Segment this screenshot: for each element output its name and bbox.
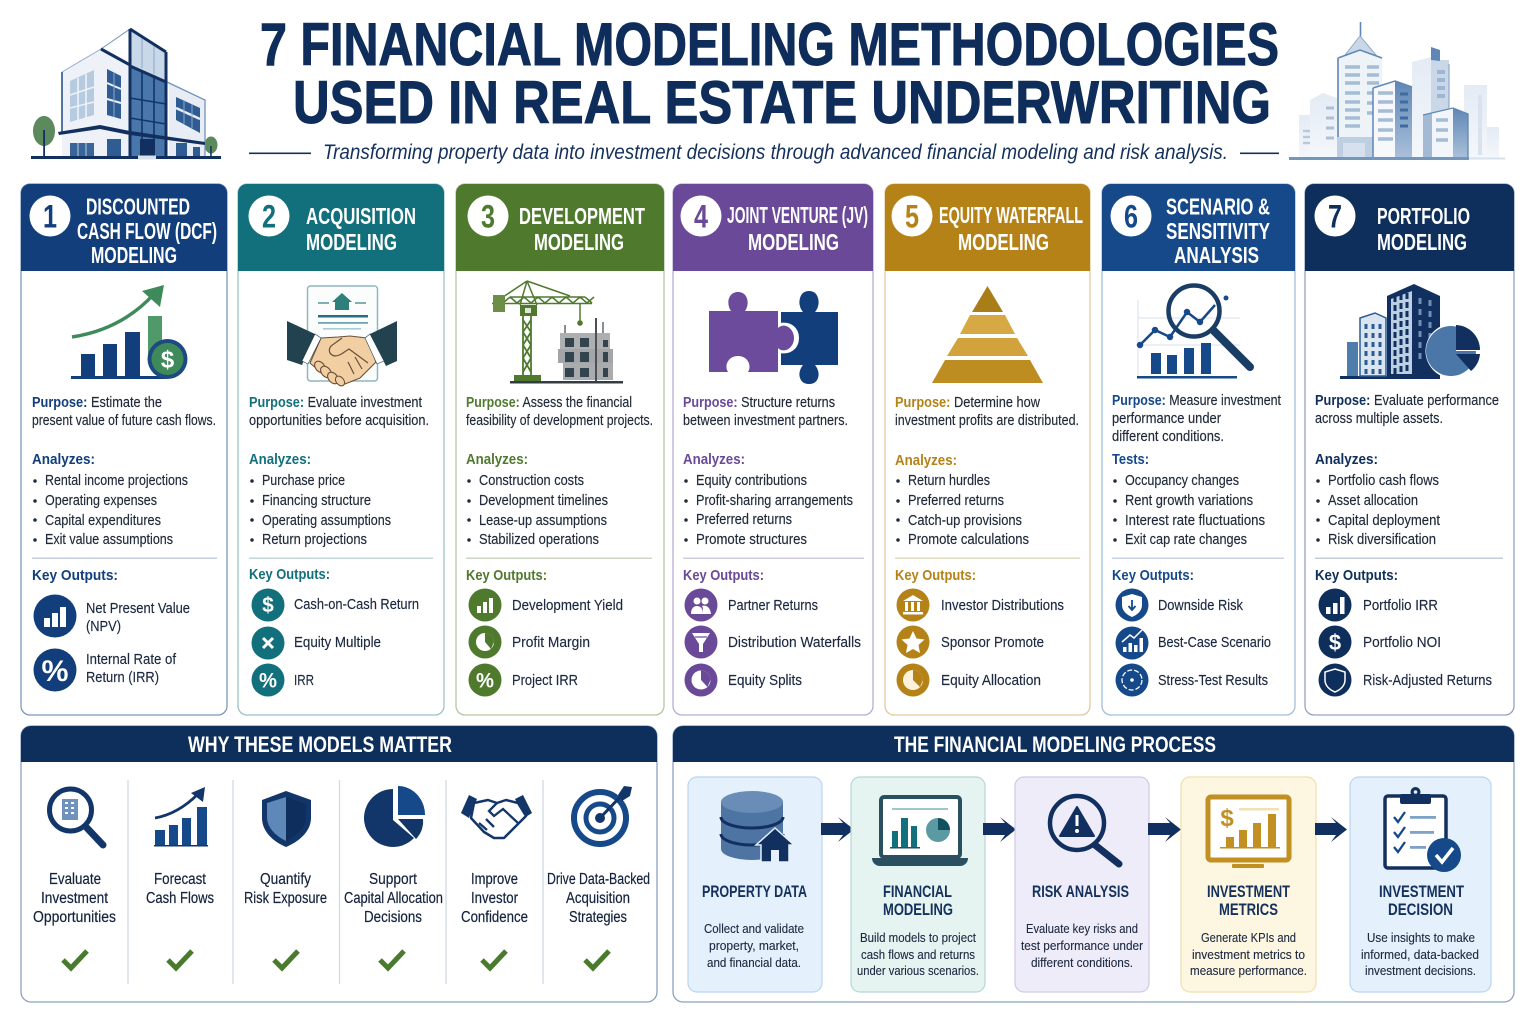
step: financial modeling: under various scenarios. bbox=[857, 963, 979, 978]
card 6 key outputs: Downside Risk bbox=[1158, 598, 1244, 614]
card 4 analyzes list: Profit-sharing arrangements bbox=[696, 493, 853, 509]
card 7 key outputs: Portfolio NOI bbox=[1363, 635, 1441, 651]
card 7 key outputs: $ bbox=[1329, 630, 1341, 655]
card 2 key outputs: IRR bbox=[294, 673, 314, 689]
card 6: scenario and sensitivity analysis bbox=[1102, 184, 1295, 715]
card 1: DCF modeling bbox=[21, 184, 227, 715]
card 2 header: MODELING bbox=[306, 229, 397, 255]
title bbox=[260, 10, 1279, 136]
card 5 header: MODELING bbox=[958, 229, 1049, 255]
step: financial modeling: FINANCIAL bbox=[883, 883, 952, 901]
step: investment decision: INVESTMENT bbox=[1379, 883, 1464, 901]
card 6 purpose bbox=[1112, 393, 1281, 445]
card 4 header: JOINT VENTURE (JV) bbox=[727, 202, 868, 228]
card 7 analyzes list: Asset allocation bbox=[1328, 493, 1418, 509]
card 7 header: MODELING bbox=[1377, 229, 1467, 255]
item: improve investor confidence bbox=[461, 795, 532, 968]
card 7 analyzes list: Portfolio cash flows bbox=[1328, 473, 1439, 489]
item: support capital allocation decisions bbox=[344, 786, 443, 968]
step: financial modeling: MODELING bbox=[883, 901, 953, 919]
card 6 purpose: performance under bbox=[1112, 411, 1221, 427]
item: evaluate investment opportunities: Opportunities bbox=[33, 909, 116, 926]
arrow bbox=[1148, 817, 1181, 842]
item: drive data-backed acquisition strategies: Acquisition bbox=[566, 890, 630, 907]
card 3 key outputs bbox=[466, 567, 623, 696]
card 2 analyzes list: Operating assumptions bbox=[262, 513, 391, 529]
card 7 header bbox=[1305, 184, 1514, 271]
card 3 analyzes list: Lease-up assumptions bbox=[479, 513, 607, 529]
card 3: development modeling bbox=[456, 184, 664, 715]
subtitle: Transforming property data into investment decisions through advanced financial modeling and risk analysis. bbox=[323, 141, 1228, 164]
card 1 header: 1 bbox=[43, 198, 57, 234]
card 3 header: DEVELOPMENT bbox=[519, 203, 645, 229]
icon: magnifier over charts bbox=[1137, 286, 1250, 378]
card 1 analyzes list: Rental income projections bbox=[45, 473, 188, 489]
panel heading: why these models matter: WHY THESE MODELS MATTER bbox=[188, 732, 452, 757]
icon: growth chart with coin bbox=[71, 285, 188, 379]
card 6 tests list: Tests: bbox=[1112, 451, 1149, 468]
card 2 analyzes list: Analyzes: bbox=[249, 451, 311, 468]
step: financial modeling: Build models to project bbox=[860, 930, 976, 945]
card 1 analyzes list: Analyzes: bbox=[32, 451, 95, 468]
icon: interlocking puzzle pieces bbox=[709, 290, 839, 385]
card 5: equity waterfall modeling bbox=[885, 184, 1090, 715]
step: risk analysis: Evaluate key risks and bbox=[1026, 921, 1138, 936]
step: investment metrics: METRICS bbox=[1219, 901, 1278, 919]
card 3 header bbox=[456, 184, 664, 271]
illustration: office building bbox=[31, 29, 221, 160]
card 5 key outputs: Key Outputs: bbox=[895, 567, 976, 584]
step: investment metrics: INVESTMENT bbox=[1207, 883, 1290, 901]
card 4 key outputs: Equity Splits bbox=[728, 673, 802, 689]
panel heading: the financial modeling process bbox=[673, 726, 1514, 762]
card 6 header: 6 bbox=[1124, 198, 1138, 234]
card 5 analyzes list: Preferred returns bbox=[908, 493, 1004, 509]
card 7 analyzes list: Analyzes: bbox=[1315, 451, 1378, 468]
card 6 key outputs: Key Outputs: bbox=[1112, 567, 1194, 584]
card 6 tests list: Exit cap rate changes bbox=[1125, 532, 1247, 548]
card 4 header bbox=[673, 184, 873, 271]
card 6 tests list bbox=[1112, 451, 1265, 548]
card 5 key outputs bbox=[895, 567, 1064, 696]
step: investment decision bbox=[1350, 777, 1491, 992]
card 2 analyzes list: Financing structure bbox=[262, 493, 371, 509]
card 7 purpose: Purpose: Evaluate performance bbox=[1315, 393, 1499, 409]
step: property data: property, market, bbox=[709, 938, 799, 953]
card 4 header: 4 bbox=[694, 198, 708, 234]
card 4 analyzes list: Preferred returns bbox=[696, 512, 792, 528]
card 3 key outputs: % bbox=[476, 670, 494, 692]
item: drive data-backed acquisition strategies: Drive Data-Backed bbox=[547, 871, 650, 888]
card 6 purpose: different conditions. bbox=[1112, 429, 1224, 445]
card 6 key outputs: Stress-Test Results bbox=[1158, 673, 1268, 689]
card 7: portfolio modeling bbox=[1305, 184, 1514, 715]
item: support capital allocation decisions: Support bbox=[369, 871, 418, 888]
step: investment decision: Use insights to make bbox=[1367, 930, 1475, 945]
card 6 tests list: Interest rate fluctuations bbox=[1125, 513, 1265, 529]
step: risk analysis bbox=[1015, 777, 1149, 992]
card 3 key outputs: Project IRR bbox=[512, 673, 578, 689]
panel heading: why these models matter bbox=[21, 726, 657, 762]
icon: buildings and pie chart bbox=[1340, 284, 1480, 379]
card 7 header: 7 bbox=[1328, 198, 1342, 234]
item: quantify risk exposure: Risk Exposure bbox=[244, 890, 327, 907]
card 5 purpose: Purpose: Determine how bbox=[895, 395, 1040, 411]
card 2 purpose: opportunities before acquisition. bbox=[249, 413, 429, 429]
card 1 header: DISCOUNTED bbox=[86, 194, 190, 220]
card 3 purpose: Purpose: Assess the financial bbox=[466, 395, 632, 411]
step: risk analysis: test performance under bbox=[1021, 938, 1144, 953]
card 2 key outputs: % bbox=[259, 670, 277, 692]
card 1 key outputs: % bbox=[42, 655, 68, 688]
item: evaluate investment opportunities: Evaluate bbox=[49, 871, 101, 888]
card 2 key outputs: Key Outputs: bbox=[249, 566, 330, 583]
card 3 header: MODELING bbox=[534, 229, 624, 255]
item: support capital allocation decisions: Capital Allocation bbox=[344, 890, 443, 907]
card 7 analyzes list: Capital deployment bbox=[1328, 513, 1440, 529]
step: property data: Collect and validate bbox=[704, 921, 804, 936]
card 3 key outputs: Profit Margin bbox=[512, 635, 590, 651]
item: quantify risk exposure bbox=[244, 791, 327, 968]
card 1 analyzes list bbox=[32, 451, 188, 548]
illustration: city skyline bbox=[1289, 22, 1505, 160]
card 4 purpose: Purpose: Structure returns bbox=[683, 395, 835, 411]
card 1 purpose bbox=[32, 395, 216, 429]
card 5 analyzes list: Return hurdles bbox=[908, 473, 990, 489]
card 6 header: SENSITIVITY bbox=[1166, 218, 1270, 244]
step: property data: and financial data. bbox=[707, 955, 801, 970]
card 3 purpose: feasibility of development projects. bbox=[466, 413, 653, 429]
card 2 analyzes list: Return projections bbox=[262, 532, 367, 548]
card 7 analyzes list bbox=[1315, 451, 1440, 548]
item: evaluate investment opportunities: Investment bbox=[41, 890, 109, 907]
card 2: acquisition modeling bbox=[238, 184, 444, 715]
title: 7 FINANCIAL MODELING METHODOLOGIES bbox=[260, 10, 1279, 78]
panel heading: the financial modeling process: THE FINANCIAL MODELING PROCESS bbox=[894, 732, 1216, 757]
card 4 key outputs bbox=[683, 567, 861, 696]
card 2 key outputs: Equity Multiple bbox=[294, 635, 381, 651]
item: quantify risk exposure: Quantify bbox=[260, 871, 311, 888]
card 4 purpose bbox=[683, 395, 848, 429]
step: investment metrics: $ bbox=[1220, 805, 1234, 832]
card 6 header: ANALYSIS bbox=[1174, 242, 1259, 268]
card 1 header: CASH FLOW (DCF) bbox=[77, 218, 217, 244]
icon: tiered pyramid bbox=[932, 286, 1043, 383]
card 6 header bbox=[1102, 184, 1295, 271]
item: drive data-backed acquisition strategies bbox=[547, 786, 650, 968]
card 7 key outputs: Key Outputs: bbox=[1315, 567, 1398, 584]
card 1 key outputs: Key Outputs: bbox=[32, 567, 118, 584]
item: forecast cash flows: Cash Flows bbox=[146, 890, 214, 907]
card 3 key outputs: Key Outputs: bbox=[466, 567, 547, 584]
card 4 analyzes list: Equity contributions bbox=[696, 473, 807, 489]
card 5 header bbox=[885, 184, 1090, 271]
card 1 analyzes list: Operating expenses bbox=[45, 493, 157, 509]
card 5 header: EQUITY WATERFALL bbox=[939, 202, 1083, 228]
card 3 analyzes list: Analyzes: bbox=[466, 451, 528, 468]
panel: why these models matter bbox=[21, 726, 657, 1002]
card 2 purpose: Purpose: Evaluate investment bbox=[249, 395, 422, 411]
card 5 analyzes list: Analyzes: bbox=[895, 452, 957, 469]
step: property data: PROPERTY DATA bbox=[702, 883, 807, 901]
card 1 key outputs bbox=[32, 567, 190, 692]
card 4 analyzes list bbox=[683, 451, 853, 548]
icon: growth chart with coin: $ bbox=[161, 346, 175, 374]
step: property data bbox=[688, 777, 822, 992]
card 4 key outputs: Partner Returns bbox=[728, 598, 818, 614]
card 6 tests list: Occupancy changes bbox=[1125, 473, 1239, 489]
item: improve investor confidence: Improve bbox=[471, 871, 518, 888]
card 7 purpose bbox=[1315, 393, 1499, 427]
card 7 header: PORTFOLIO bbox=[1377, 203, 1470, 229]
card 3 analyzes list bbox=[466, 451, 608, 548]
step: investment metrics bbox=[1181, 777, 1316, 992]
step: financial modeling bbox=[851, 777, 985, 992]
card 5 purpose bbox=[895, 395, 1079, 429]
item: improve investor confidence: Investor bbox=[471, 890, 518, 907]
card 2 analyzes list: Purchase price bbox=[262, 473, 345, 489]
step: investment metrics: Generate KPIs and bbox=[1201, 930, 1296, 945]
card 7 key outputs bbox=[1315, 567, 1492, 696]
item: forecast cash flows: Forecast bbox=[154, 871, 207, 888]
arrow bbox=[821, 817, 854, 842]
card 5 key outputs: Sponsor Promote bbox=[941, 635, 1044, 651]
card 4 key outputs: Distribution Waterfalls bbox=[728, 635, 861, 651]
step: investment decision: DECISION bbox=[1388, 901, 1453, 919]
card 1 analyzes list: Capital expenditures bbox=[45, 513, 161, 529]
step: risk analysis: RISK ANALYSIS bbox=[1032, 883, 1129, 901]
card 3 analyzes list: Construction costs bbox=[479, 473, 584, 489]
card 1 key outputs: Net Present Value bbox=[86, 601, 190, 617]
card 1 purpose: Purpose: Estimate the bbox=[32, 395, 162, 411]
card 4: joint venture modeling bbox=[673, 184, 873, 715]
card 3 analyzes list: Stabilized operations bbox=[479, 532, 599, 548]
card 3 key outputs: Development Yield bbox=[512, 598, 623, 614]
card 3 analyzes list: Development timelines bbox=[479, 493, 608, 509]
card 2 analyzes list bbox=[249, 451, 391, 548]
card 3 header: 3 bbox=[481, 198, 495, 234]
step: investment decision: informed, data-backed bbox=[1361, 947, 1479, 962]
card 6 purpose: Purpose: Measure investment bbox=[1112, 393, 1281, 409]
card 5 analyzes list: Promote calculations bbox=[908, 532, 1029, 548]
item: improve investor confidence: Confidence bbox=[461, 909, 528, 926]
card 6 header: SCENARIO & bbox=[1166, 194, 1270, 220]
step: investment metrics: investment metrics to bbox=[1192, 947, 1305, 962]
item: support capital allocation decisions: Decisions bbox=[364, 909, 422, 926]
card 5 key outputs: Investor Distributions bbox=[941, 598, 1064, 614]
card 6 key outputs: Best-Case Scenario bbox=[1158, 635, 1271, 651]
card 4 analyzes list: Analyzes: bbox=[683, 451, 745, 468]
panel: the financial modeling process bbox=[673, 726, 1514, 1002]
card 1 key outputs: Return (IRR) bbox=[86, 670, 159, 686]
card 2 key outputs bbox=[249, 566, 419, 696]
card 5 key outputs: Equity Allocation bbox=[941, 673, 1041, 689]
card 1 header bbox=[21, 184, 227, 271]
card 2 key outputs: $ bbox=[262, 594, 274, 617]
arrow bbox=[983, 817, 1016, 842]
step: investment decision: investment decisions. bbox=[1365, 963, 1476, 978]
card 7 analyzes list: Risk diversification bbox=[1328, 532, 1436, 548]
item: evaluate investment opportunities bbox=[33, 789, 116, 968]
step: risk analysis: different conditions. bbox=[1031, 955, 1133, 970]
item: drive data-backed acquisition strategies: Strategies bbox=[569, 909, 627, 926]
icon: tower crane and building bbox=[492, 281, 623, 384]
card 1 purpose: present value of future cash flows. bbox=[32, 413, 216, 429]
card 5 analyzes list bbox=[895, 452, 1029, 548]
card 1 header: MODELING bbox=[91, 242, 177, 268]
card 7 key outputs: Risk-Adjusted Returns bbox=[1363, 673, 1492, 689]
card 6 key outputs bbox=[1112, 567, 1271, 696]
card 4 purpose: between investment partners. bbox=[683, 413, 848, 429]
card 5 purpose: investment profits are distributed. bbox=[895, 413, 1079, 429]
card 6 tests list: Rent growth variations bbox=[1125, 493, 1253, 509]
card 1 analyzes list: Exit value assumptions bbox=[45, 532, 173, 548]
card 1 key outputs: Internal Rate of bbox=[86, 652, 177, 668]
arrow bbox=[1315, 817, 1347, 842]
card 2 key outputs: Cash-on-Cash Return bbox=[294, 597, 419, 613]
card 5 analyzes list: Catch-up provisions bbox=[908, 513, 1022, 529]
icon: handshake over contract bbox=[287, 286, 397, 388]
item: forecast cash flows bbox=[146, 787, 214, 968]
step: financial modeling: cash flows and returns bbox=[861, 947, 975, 962]
card 4 header: MODELING bbox=[748, 229, 839, 255]
card 3 purpose bbox=[466, 395, 653, 429]
card 2 header bbox=[238, 184, 444, 271]
card 7 purpose: across multiple assets. bbox=[1315, 411, 1443, 427]
title: USED IN REAL ESTATE UNDERWRITING bbox=[293, 68, 1271, 136]
card 2 header: 2 bbox=[262, 198, 276, 234]
card 5 header: 5 bbox=[905, 198, 919, 234]
step: investment metrics: measure performance. bbox=[1190, 963, 1307, 978]
card 7 key outputs: Portfolio IRR bbox=[1363, 598, 1438, 614]
card 4 analyzes list: Promote structures bbox=[696, 532, 807, 548]
card 2 header: ACQUISITION bbox=[306, 203, 416, 229]
card 2 purpose bbox=[249, 395, 429, 429]
card 4 key outputs: Key Outputs: bbox=[683, 567, 764, 584]
card 1 key outputs: (NPV) bbox=[86, 619, 121, 635]
